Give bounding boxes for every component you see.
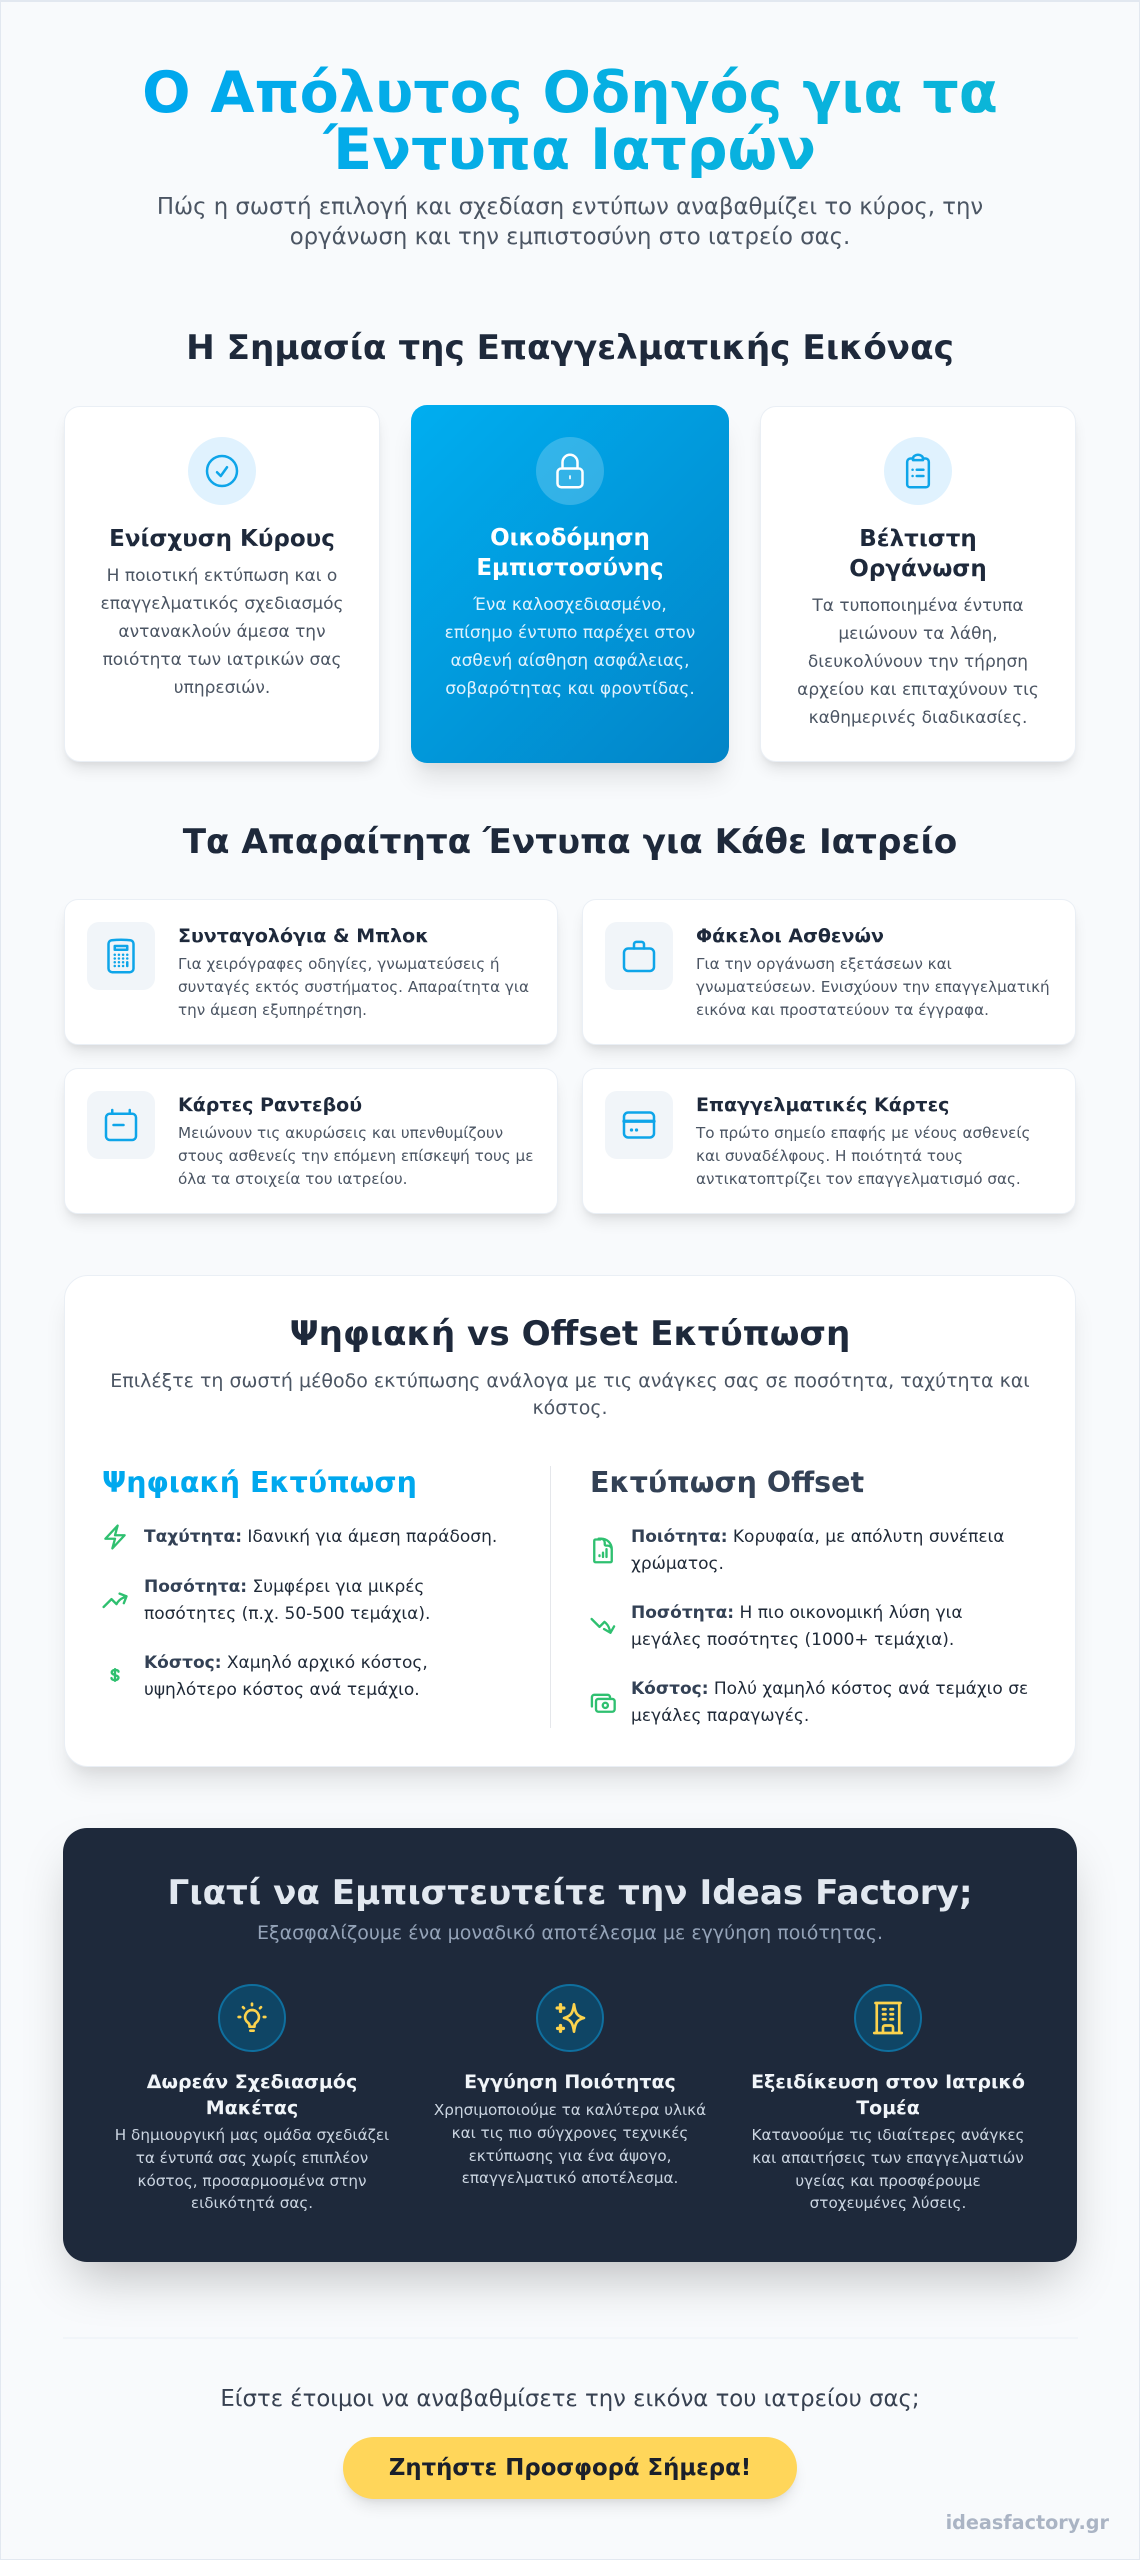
icon: bolt xyxy=(104,1524,126,1550)
icon: building xyxy=(854,1984,922,2052)
feature: quantity: Ποσότητα: Η πιο οικονομική λύση για xyxy=(631,1603,963,1623)
card text: σοβαρότητας και φροντίδας. xyxy=(445,679,695,699)
icon: credit card xyxy=(605,1091,673,1159)
card text: μειώνουν τα λάθη, xyxy=(838,624,998,644)
panel heading: Γιατί να Εμπιστευτείτε την Ideas Factory; xyxy=(167,1873,973,1913)
card text: καθημερινές διαδικασίες. xyxy=(809,708,1027,728)
feature text: επαγγελματικό αποτέλεσμα. xyxy=(462,2169,678,2187)
item text: Για την οργάνωση εξετάσεων και xyxy=(696,955,952,973)
feature title: Δωρεάν Σχεδιασμός xyxy=(147,2071,357,2093)
item text: Το πρώτο σημείο επαφής με νέους ασθενείς xyxy=(696,1124,1030,1142)
feature: quality xyxy=(631,1527,1005,1574)
panel: appointment cards xyxy=(64,1068,558,1214)
feature title xyxy=(146,2071,357,2119)
card title: Ενίσχυση Κύρους xyxy=(109,526,335,552)
icon: trending up xyxy=(102,1592,128,1608)
button label: Ζητήστε Προσφορά Σήμερα! xyxy=(389,2455,751,2481)
feature: quality: χρώματος. xyxy=(631,1554,724,1574)
card text: αρχείου και επιταχύνουν τις xyxy=(797,680,1039,700)
card text: αντανακλούν άμεσα την xyxy=(118,622,326,642)
feature: quantity: ποσότητες (π.χ. 50-500 τεμάχια). xyxy=(144,1604,430,1624)
card text: Τα τυποποιημένα έντυπα xyxy=(812,596,1024,616)
feature text: και απαιτήσεις των επαγγελματιών xyxy=(752,2149,1024,2167)
icon: briefcase xyxy=(605,922,673,990)
card title: Οργάνωση xyxy=(849,556,987,582)
feature text: ειδικότητά σας. xyxy=(191,2194,313,2212)
item text: την άμεση εξυπηρέτηση. xyxy=(178,1000,367,1018)
panel: organisation card xyxy=(760,406,1076,762)
card title: Βέλτιστη xyxy=(859,526,977,552)
column heading: offset: Εκτύπωση Offset xyxy=(590,1466,864,1499)
feature: cost: μεγάλες παραγωγές. xyxy=(631,1706,809,1726)
item text xyxy=(178,1124,533,1188)
feature: cost: Κόστος: Πολύ χαμηλό κόστος ανά τεμάχιο σε xyxy=(631,1679,1028,1699)
divider line xyxy=(550,1466,551,1728)
item text: Μειώνουν τις ακυρώσεις και υπενθυμίζουν xyxy=(178,1124,503,1142)
feature: quantity: μεγάλες ποσότητες (1000+ τεμάχια). xyxy=(631,1630,954,1650)
item text xyxy=(696,955,1050,1018)
card text: υπηρεσιών. xyxy=(174,678,270,698)
feature text xyxy=(434,2101,706,2187)
item text: αντικατοπτρίζει τον επαγγελματισμό σας. xyxy=(696,1170,1021,1188)
panel: business cards xyxy=(582,1068,1076,1214)
item text: εικόνα και προστατεύουν τα έγγραφα. xyxy=(696,1000,989,1018)
icon: banknotes xyxy=(590,1694,616,1713)
card text xyxy=(445,595,695,699)
item text: συνταγές εκτός συστήματος. Απαραίτητα για xyxy=(178,978,529,996)
title: Έντυπα Ιατρών xyxy=(324,116,816,182)
card text: διευκολύνουν την τήρηση xyxy=(808,652,1028,672)
feature title xyxy=(751,2071,1025,2119)
icon: calculator xyxy=(87,922,155,990)
card text: Ένα καλοσχεδιασμένο, xyxy=(473,595,667,615)
feature: cost xyxy=(631,1679,1028,1726)
feature text: Κατανοούμε τις ιδιαίτερες ανάγκες xyxy=(752,2126,1024,2144)
panel: digital vs offset xyxy=(64,1275,1076,1767)
panel: why trust Ideas Factory xyxy=(63,1828,1077,2262)
card title xyxy=(476,525,664,581)
heading: essential prints: Τα Απαραίτητα Έντυπα για Κάθε Ιατρείο xyxy=(183,822,957,862)
item text: Για χειρόγραφες οδηγίες, γνωματεύσεις ή xyxy=(178,955,500,973)
item title: Επαγγελματικές Κάρτες xyxy=(696,1094,949,1116)
feature title: Εξειδίκευση στον Ιατρικό xyxy=(751,2071,1025,2093)
call to action button xyxy=(343,2437,797,2499)
feature: cost: Κόστος: Χαμηλό αρχικό κόστος, xyxy=(144,1653,428,1673)
feature text: κόστος, προσαρμοσμένα στην xyxy=(138,2172,366,2190)
card title xyxy=(849,526,987,582)
panel: trust card xyxy=(411,405,729,763)
card title: Εμπιστοσύνης xyxy=(476,555,664,581)
feature text: Η δημιουργική μας ομάδα σχεδιάζει xyxy=(115,2126,389,2144)
card text: ασθενή αίσθηση ασφάλειας, xyxy=(450,651,690,671)
panel intro: Επιλέξτε τη σωστή μέθοδο εκτύπωσης ανάλογα με τις ανάγκες σας σε ποσότητα, ταχύτητα και xyxy=(110,1370,1030,1392)
feature text: Χρησιμοποιούμε τα καλύτερα υλικά xyxy=(434,2101,706,2119)
feature text: υγείας και προσφέρουμε xyxy=(795,2172,981,2190)
card text: επίσημο έντυπο παρέχει στον xyxy=(445,623,695,643)
icon: dollar xyxy=(110,1668,120,1682)
panel: patient folders xyxy=(582,899,1076,1045)
panel heading: Ψηφιακή vs Offset Εκτύπωση xyxy=(290,1314,850,1354)
icon: document chart xyxy=(593,1538,613,1564)
card text: ποιότητα των ιατρικών σας xyxy=(103,650,341,670)
feature text: και τις πιο σύγχρονες τεχνικές xyxy=(452,2124,688,2142)
item title: Φάκελοι Ασθενών xyxy=(696,925,884,947)
panel intro xyxy=(110,1370,1030,1419)
item text xyxy=(178,955,529,1018)
icon: check circle xyxy=(188,437,256,505)
feature: speed: Ταχύτητα: Ιδανική για άμεση παράδοση. xyxy=(144,1527,497,1547)
title xyxy=(142,60,998,182)
item text: γνωματεύσεων. Ενισχύουν την επαγγελματική xyxy=(696,978,1050,996)
feature title: Εγγύηση Ποιότητας xyxy=(464,2071,676,2093)
feature title: Τομέα xyxy=(856,2097,920,2119)
item title: Συνταγολόγια & Μπλοκ xyxy=(178,925,429,947)
item text: και συναδέλφους. Η ποιότητά τους xyxy=(696,1147,963,1165)
icon: trending down xyxy=(590,1618,616,1634)
card text xyxy=(797,596,1039,728)
icon: sparkles xyxy=(536,1984,604,2052)
feature text: τα έντυπά σας χωρίς επιπλέον xyxy=(136,2149,368,2167)
icon: clipboard xyxy=(884,437,952,505)
feature: quantity xyxy=(144,1577,430,1624)
item text: όλα τα στοιχεία του ιατρείου. xyxy=(178,1170,408,1188)
icon: lock xyxy=(536,437,604,505)
feature: quantity: Ποσότητα: Συμφέρει για μικρές xyxy=(144,1577,424,1597)
subtitle: οργάνωση και την εμπιστοσύνη στο ιατρείο σας. xyxy=(290,224,850,250)
feature: quality: Ποιότητα: Κορυφαία, με απόλυτη συνέπεια xyxy=(631,1527,1005,1547)
feature text xyxy=(752,2126,1024,2212)
item title: Κάρτες Ραντεβού xyxy=(178,1094,362,1116)
feature title: Μακέτας xyxy=(206,2097,298,2119)
card text: επαγγελματικός σχεδιασμός xyxy=(101,594,343,614)
card text xyxy=(101,566,343,698)
panel intro: Εξασφαλίζουμε ένα μοναδικό αποτέλεσμα με εγγύηση ποιότητας. xyxy=(257,1922,883,1944)
subtitle: Πώς η σωστή επιλογή και σχεδίαση εντύπων αναβαθμίζει το κύρος, την xyxy=(157,194,983,220)
card title: Οικοδόμηση xyxy=(490,525,650,551)
title: Ο Απόλυτος Οδηγός για τα xyxy=(142,60,998,126)
heading: professional image: Η Σημασία της Επαγγελματικής Εικόνας xyxy=(186,328,954,368)
item text: στους ασθενείς την επόμενη επίσκεψή τους με xyxy=(178,1147,533,1165)
column heading: digital: Ψηφιακή Εκτύπωση xyxy=(102,1466,417,1499)
panel: authority card xyxy=(64,406,380,762)
feature text: στοχευμένες λύσεις. xyxy=(810,2194,966,2212)
icon: calendar xyxy=(87,1091,155,1159)
feature: quantity xyxy=(631,1603,963,1650)
item text xyxy=(696,1124,1030,1188)
feature text: εκτύπωσης για ένα άψογο, xyxy=(469,2146,671,2164)
call to action text: Είστε έτοιμοι να αναβαθμίσετε την εικόνα του ιατρείου σας; xyxy=(220,2386,920,2412)
subtitle xyxy=(157,194,983,250)
footer divider xyxy=(63,2337,1078,2339)
card text: Η ποιοτική εκτύπωση και ο xyxy=(107,566,337,586)
panel intro: κόστος. xyxy=(532,1397,608,1419)
site watermark: ideasfactory.gr xyxy=(946,2511,1109,2534)
feature text xyxy=(115,2126,389,2212)
feature: cost xyxy=(144,1653,428,1700)
icon: light bulb xyxy=(218,1984,286,2052)
panel: prescription pads xyxy=(64,899,558,1045)
feature: cost: υψηλότερο κόστος ανά τεμάχιο. xyxy=(144,1680,420,1700)
